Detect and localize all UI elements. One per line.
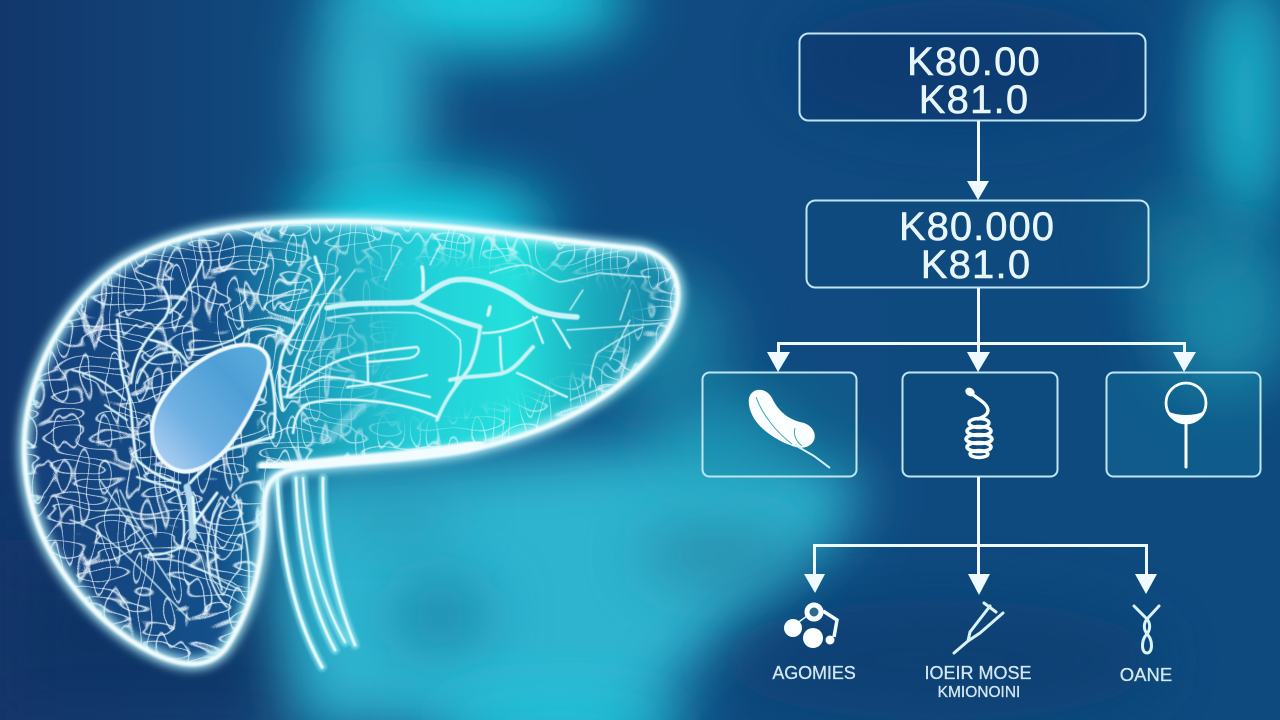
- branching arrows to icon boxes: [767, 288, 1196, 372]
- item: crutch instrument: IOEIR MOSE: [924, 663, 1032, 683]
- flow chart: [702, 34, 1260, 701]
- item: crutch instrument: KMIONOINI: [938, 684, 1020, 701]
- top code box: K80.00: [907, 40, 1041, 84]
- bile ducts below the liver: [277, 478, 355, 667]
- liver outline glow: [24, 221, 678, 664]
- gallbladder: [152, 345, 269, 471]
- top code box: [800, 34, 1146, 122]
- icon: organ with tail: [749, 390, 830, 468]
- top code box: K81.0: [919, 78, 1029, 122]
- second code box: K81.0: [921, 243, 1031, 287]
- liver outline: [24, 221, 678, 664]
- liver veins: [70, 245, 663, 620]
- item: molecules: [772, 605, 856, 683]
- panel: feather-shaped organ icon: [702, 372, 856, 476]
- item: forked tool: OANE: [1120, 664, 1172, 685]
- panel: coiled intestine icon: [902, 372, 1058, 476]
- icon: coil: [964, 386, 992, 458]
- item: molecules: AGOMIES: [772, 663, 856, 683]
- porta band along the lower edge: [262, 444, 480, 466]
- liver body: [15, 210, 685, 675]
- item: forked tool: [1120, 606, 1172, 685]
- branching arrows to lower icons: [804, 477, 1157, 595]
- item: crutch instrument: [924, 603, 1032, 701]
- icon: molecule cluster: [784, 605, 837, 648]
- icon: probe: [1166, 383, 1206, 467]
- panel: round-headed probe icon: [1106, 372, 1260, 476]
- second code box: [806, 200, 1148, 288]
- icon: crutch: [954, 603, 1003, 653]
- icon: fork: [1134, 606, 1159, 653]
- illustration: glowing liver: [15, 210, 685, 675]
- second code box: K80.000: [899, 205, 1055, 249]
- arrow: top box to second box: [967, 121, 989, 200]
